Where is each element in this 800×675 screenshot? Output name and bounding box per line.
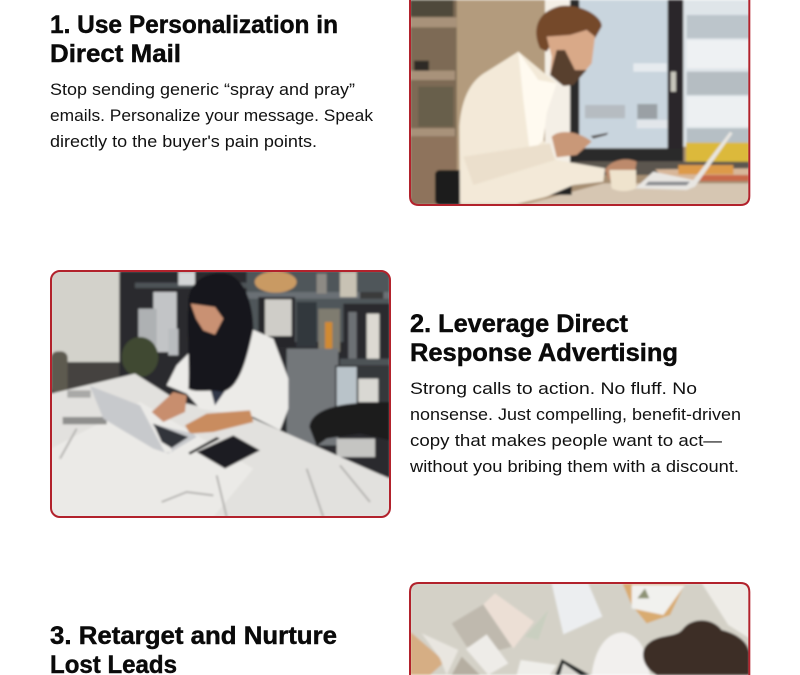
body text 1: Stop sending generic “spray and pray”	[50, 80, 355, 99]
photo 3: person with curly hair among paper samples	[410, 583, 749, 675]
body text 2: nonsense. Just compelling, benefit-driven	[410, 405, 741, 424]
heading 3	[50, 622, 337, 675]
heading 3: 3. Retarget and Nurture	[50, 622, 337, 650]
body text 1: emails. Personalize your message. Speak	[50, 106, 374, 125]
photo 2: woman typing on laptop at marble table	[51, 271, 390, 517]
photo 1: man at desk with phone and laptop	[410, 0, 749, 205]
body text 2: copy that makes people want to act—	[410, 431, 722, 450]
section 1: personalization text	[50, 11, 374, 151]
heading 1	[50, 11, 338, 68]
section 2: direct response text	[409, 310, 741, 476]
heading 1: Direct Mail	[50, 40, 181, 68]
body text 1: directly to the buyer's pain points.	[50, 132, 317, 151]
body text 1	[50, 80, 374, 151]
body text 2	[409, 379, 741, 476]
heading 1: 1. Use Personalization in	[50, 11, 338, 39]
heading 2: 2. Leverage Direct	[410, 310, 629, 338]
body text 2: Strong calls to action. No fluff. No	[410, 379, 697, 398]
heading 2: Response Advertising	[410, 339, 678, 367]
body text 2: without you bribing them with a discount.	[409, 457, 739, 476]
heading 2	[410, 310, 678, 367]
